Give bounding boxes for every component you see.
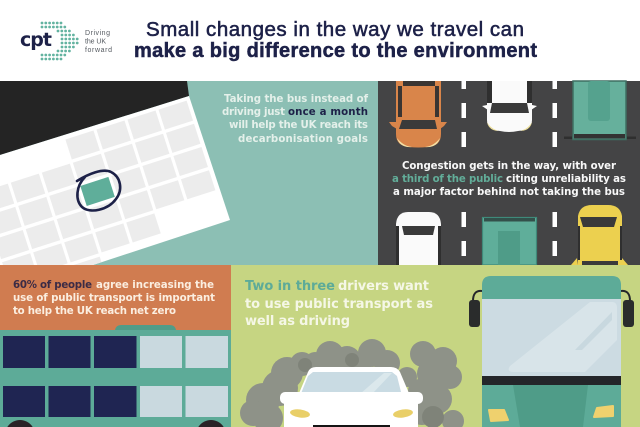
- text: once a month: decarbonisation goals: [238, 134, 368, 145]
- logo: cpt: the UK: [85, 38, 106, 46]
- car: yellow: [571, 205, 628, 265]
- bus: front: [469, 276, 634, 427]
- calendar grid: [0, 100, 216, 265]
- lane markings: [462, 81, 557, 256]
- panel: calendar: [0, 81, 378, 265]
- text: congestion: a major factor behind not taking the bus: [393, 187, 625, 198]
- text: two in three: Two in three: [245, 279, 335, 294]
- text: once a month: driving just: [222, 107, 285, 118]
- text: two in three: drivers want: [338, 279, 429, 294]
- logo: cpt: Driving: [85, 30, 110, 37]
- panel: congestion road: [378, 81, 640, 265]
- logo: cpt: cpt: [20, 29, 52, 51]
- text: once a month: will help the UK reach its: [229, 120, 368, 131]
- text: 60% of people: [13, 280, 215, 317]
- text: congestion: citing unreliability as: [506, 174, 626, 185]
- text: two in three: well as driving: [245, 314, 350, 329]
- header: [0, 0, 640, 81]
- logo: cpt: forward: [85, 47, 112, 54]
- text: congestion: [392, 161, 626, 198]
- text: 60% of people: 60% of people: [13, 280, 92, 291]
- text: once a month: Taking the bus instead of: [224, 94, 369, 105]
- van: green lower: [482, 218, 536, 265]
- title: make a big difference to the environment: [134, 40, 537, 62]
- text: 60% of people: use of public transport is important: [13, 293, 215, 304]
- car: white lower: [396, 212, 441, 265]
- car: white: [482, 81, 537, 132]
- circled day: [77, 171, 120, 210]
- car: white front: [280, 367, 423, 427]
- car: orange: [389, 81, 447, 148]
- text: once a month: [222, 94, 369, 145]
- text: 60% of people: to help the UK reach net zero: [13, 306, 176, 317]
- logo: cpt: [20, 23, 112, 59]
- panel: drivers: [231, 265, 640, 427]
- smoke cloud: [240, 339, 464, 427]
- title: Small changes in the way we travel can: [146, 18, 524, 41]
- text: congestion: a third of the public: [392, 174, 503, 185]
- panel: double-decker bus: [0, 265, 231, 427]
- text: congestion: Congestion gets in the way, with over: [402, 161, 616, 172]
- title: [134, 18, 537, 62]
- text: 60% of people: agree increasing the: [96, 280, 214, 291]
- text: two in three: [245, 279, 433, 329]
- text: once a month: once a month: [288, 107, 368, 118]
- text: two in three: to use public transport as: [245, 297, 433, 312]
- bus body: [0, 325, 231, 427]
- van: green top: [564, 81, 636, 140]
